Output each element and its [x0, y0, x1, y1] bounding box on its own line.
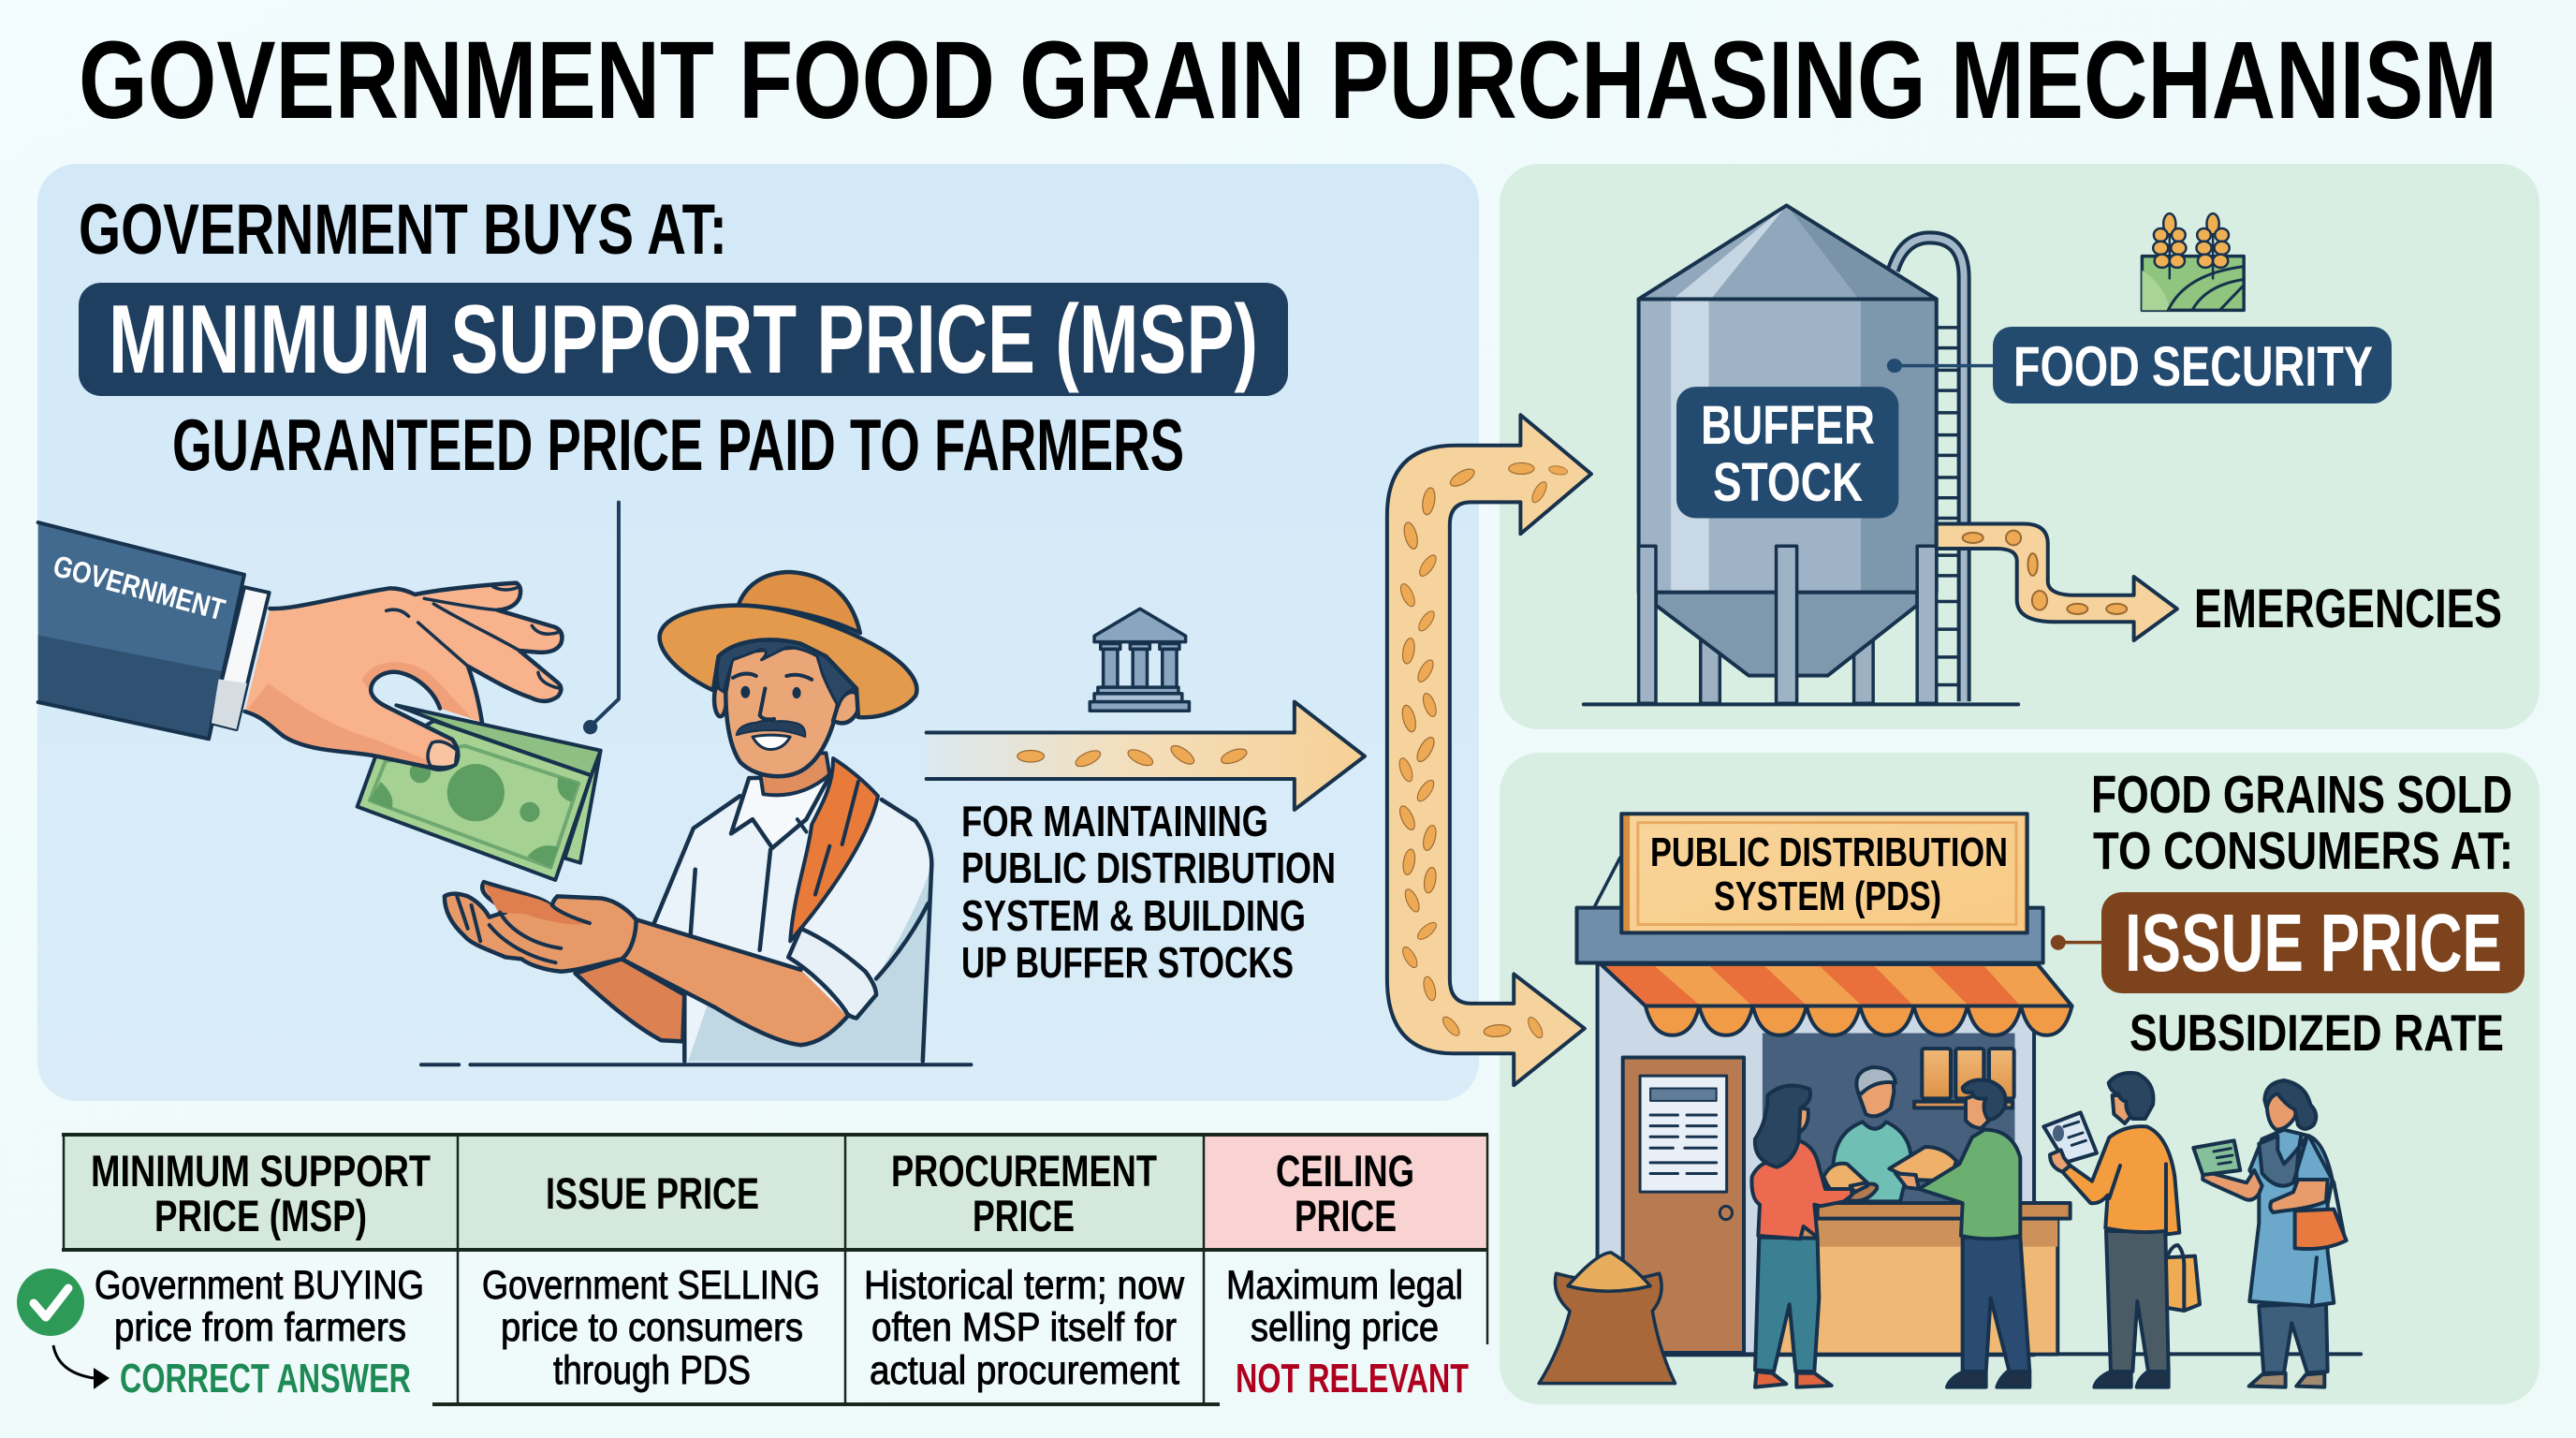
text: purpose of procurement [961, 797, 1336, 987]
column: ceiling price: CEILING [1276, 1146, 1414, 1196]
column: issue price: through PDS [553, 1348, 751, 1393]
scene: customers in queue [2043, 1073, 2347, 1387]
column: procurement price: often MSP itself for [871, 1305, 1177, 1350]
column: issue price: Government SELLING [482, 1263, 820, 1308]
interior [1763, 1034, 2014, 1209]
back legs [1701, 640, 1720, 703]
column: procurement price: PRICE [973, 1191, 1075, 1240]
issue price connector [2058, 941, 2103, 944]
column: issue price: price to consumers [501, 1305, 803, 1350]
column: ceiling price: selling price [1251, 1305, 1439, 1350]
callout leader line [583, 503, 619, 734]
heading: government buys at: GOVERNMENT BUYS AT: [79, 190, 727, 270]
icon: correct check mark [17, 1269, 84, 1336]
illustration: hand with money [245, 583, 601, 880]
illustration: farmer [421, 572, 971, 1064]
door [1623, 1057, 1744, 1353]
sign text: public distribution system: PUBLIC DISTRIBUTION [1650, 829, 2008, 875]
column: procurement price [864, 1146, 1185, 1393]
connector to food security [1895, 364, 1993, 367]
grain sack [1539, 1253, 1676, 1384]
roof [1639, 205, 1937, 299]
column: minimum support price: price from farmers [114, 1305, 406, 1350]
arrow: procurement flow [927, 702, 1365, 810]
pipe [1893, 238, 1964, 701]
badge: minimum support price: MINIMUM SUPPORT PRICE (MSP) [109, 286, 1258, 394]
money [358, 705, 601, 880]
arrow: split flow to buffer stock and PDS [1387, 415, 1591, 1085]
text: purpose of procurement: SYSTEM & BUILDING [961, 891, 1306, 940]
column: minimum support price: Government BUYING [95, 1263, 424, 1308]
sign text: public distribution system [1650, 829, 2008, 919]
column: ceiling price [1226, 1146, 1463, 1350]
flow arrows with grains [927, 415, 1591, 1085]
text: purpose of procurement: UP BUFFER STOCKS [961, 938, 1294, 987]
ground [1584, 702, 2018, 706]
emergency arrow [1937, 523, 2177, 640]
shelf with jars [1914, 1049, 2014, 1108]
column: minimum support price: MINIMUM SUPPORT [91, 1146, 431, 1196]
hat [659, 572, 916, 717]
vendor [1833, 1067, 1911, 1201]
column: minimum support price: PRICE (MSP) [154, 1191, 367, 1240]
badge: food security: FOOD SECURITY [2013, 335, 2373, 398]
awning [1601, 964, 2071, 1035]
neck and face [714, 639, 859, 795]
panel: buffer stock [1500, 164, 2539, 729]
sign text: public distribution system: SYSTEM (PDS) [1714, 873, 1941, 919]
comparison table [62, 1135, 1488, 1404]
counter [1778, 1203, 2071, 1355]
ground line [421, 1063, 971, 1066]
arm [576, 919, 876, 1045]
customer: man in orange with ration card [2043, 1073, 2200, 1387]
column: procurement price: actual procurement [870, 1348, 1179, 1393]
government sleeve [38, 522, 270, 739]
text: purpose of procurement: FOR MAINTAINING [961, 797, 1268, 845]
sign hanger [1594, 858, 1620, 908]
icon: wheat field [2142, 213, 2244, 310]
ladder [1937, 328, 1957, 684]
heading: food grains sold [2091, 765, 2513, 881]
body [1639, 299, 1937, 593]
hopper [1656, 593, 1917, 676]
customer: woman in red [1751, 1086, 1877, 1387]
panel: public distribution [1500, 753, 2539, 1404]
store fascia [1576, 908, 2043, 963]
label: buffer stock: STOCK [1713, 452, 1863, 513]
column: ceiling price: PRICE [1295, 1191, 1397, 1240]
badge: food security [1993, 327, 2392, 404]
text: purpose of procurement: PUBLIC DISTRIBUTION [961, 844, 1336, 892]
label: not relevant: NOT RELEVANT [1236, 1356, 1469, 1401]
column: ceiling price: Maximum legal [1226, 1263, 1463, 1308]
label: buffer stock [1701, 395, 1875, 513]
column: procurement price: PROCUREMENT [891, 1146, 1157, 1196]
customer: man in green [1889, 1079, 2029, 1387]
illustration: PDS shop [1539, 814, 2361, 1384]
label: government on sleeve: GOVERNMENT [50, 549, 228, 627]
column: issue price: ISSUE PRICE [546, 1168, 759, 1218]
buffer stock box [1676, 387, 1898, 519]
column: procurement price: Historical term; now [864, 1263, 1185, 1308]
column: minimum support price [91, 1146, 431, 1350]
scarf [790, 758, 878, 941]
shirt [654, 774, 931, 1061]
column: issue price [482, 1168, 820, 1393]
panel: government buys [37, 164, 1479, 1101]
arrow: to correct answer [53, 1345, 110, 1389]
label: buffer stock: BUFFER [1701, 395, 1875, 456]
sign board [1621, 814, 2027, 932]
shop wall [1598, 964, 2034, 1355]
subheading: guaranteed price: GUARANTEED PRICE PAID TO FARMERS [172, 404, 1184, 486]
icon: government building [1090, 609, 1189, 711]
illustration: silo [1584, 205, 2244, 704]
label: correct answer: CORRECT ANSWER [120, 1356, 411, 1401]
scene: counter, vendor and first customers [1751, 1049, 2071, 1387]
customer: woman in blue with card and bag [2193, 1080, 2347, 1387]
open hand [445, 882, 637, 972]
front legs [1639, 546, 1656, 703]
hand [245, 583, 562, 770]
ground line [1662, 1352, 2361, 1356]
